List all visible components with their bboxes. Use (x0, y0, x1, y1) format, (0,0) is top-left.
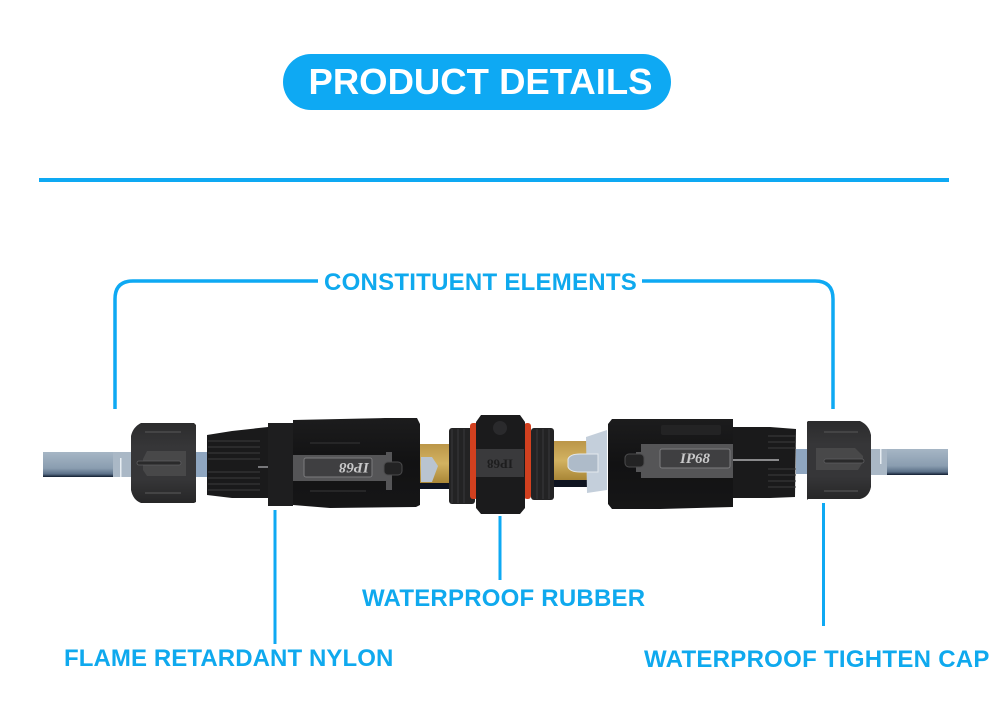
left tighten cap (131, 423, 196, 503)
right cable (796, 449, 948, 475)
header rule (39, 178, 949, 182)
center coupler (449, 415, 554, 514)
label: waterproof tighten cap: WATERPROOF TIGHTEN CAP (644, 646, 990, 673)
right body with IP68 plate: IP68 (679, 451, 710, 467)
left body with IP68 plate: IP68 (338, 459, 370, 475)
label: waterproof rubber: WATERPROOF RUBBER (362, 585, 645, 612)
right body with IP68 plate (608, 419, 733, 509)
title pill (283, 54, 671, 110)
right ribbed collar (733, 427, 796, 498)
label: constituent elements: CONSTITUENT ELEMENTS (324, 269, 637, 296)
bracket: constituent elements (115, 281, 833, 409)
left brass contact (420, 444, 449, 489)
leader lines (275, 503, 824, 644)
center coupler: IP68 (486, 456, 513, 472)
right tighten cap (807, 421, 871, 500)
left ribbed collar (207, 423, 293, 506)
label: flame retardant nylon: FLAME RETARDANT NYLON (64, 645, 393, 672)
right brass contact (554, 430, 607, 493)
title pill: PRODUCT DETAILS (308, 61, 653, 102)
left body with IP68 plate (293, 418, 420, 508)
left cable (43, 452, 207, 477)
